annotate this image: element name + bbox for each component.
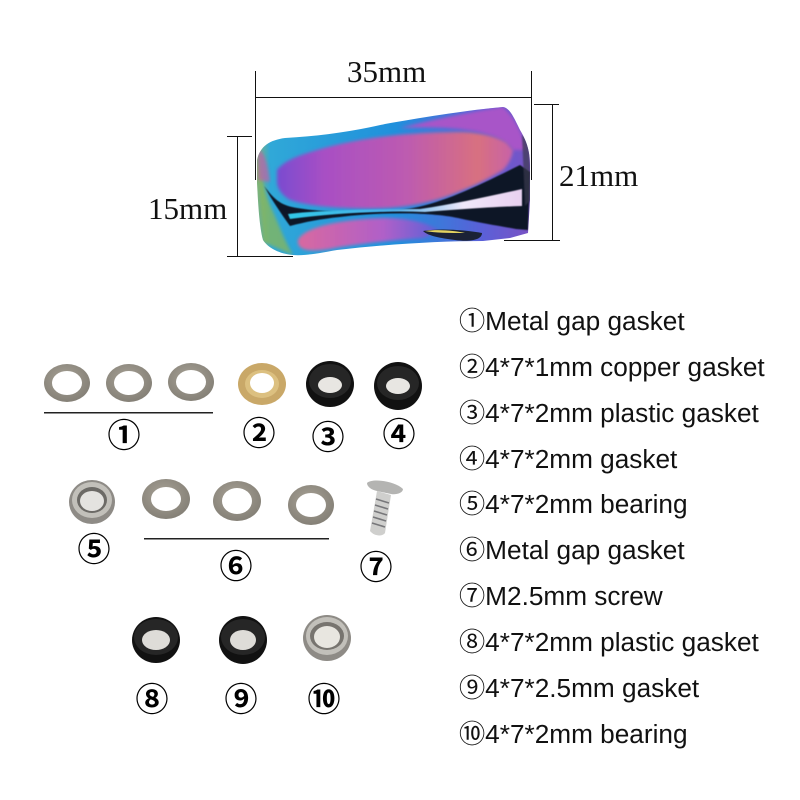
handle lower face <box>298 218 440 250</box>
part 3: plastic gasket: ③ <box>312 411 344 459</box>
part 10: bearing <box>303 615 351 721</box>
parts list: ⑤4*7*2mm bearing <box>459 489 688 519</box>
handle end cap <box>522 135 531 206</box>
part 7: screw <box>360 481 403 589</box>
parts group 1: metal gap gaskets: ① <box>108 409 140 457</box>
part 8: plastic gasket <box>132 617 180 721</box>
product photo: rainbow handle knob <box>257 107 530 256</box>
part 9: gasket: ⑨ <box>224 673 258 721</box>
part 5: bearing <box>69 480 115 571</box>
part 8: plastic gasket: ⑧ <box>136 673 168 721</box>
part 7: screw: ⑦ <box>360 541 392 589</box>
dimension: 15mm <box>148 136 293 257</box>
part 4: gasket: ④ <box>382 408 416 456</box>
parts list: ①Metal gap gasket <box>459 306 685 336</box>
parts list: ③4*7*2mm plastic gasket <box>459 398 760 428</box>
parts group 1: metal gap gaskets <box>44 363 214 457</box>
dimension: 15mm: 15mm <box>148 191 227 226</box>
dimension: 35mm: 35mm <box>347 54 426 89</box>
part 4: gasket <box>374 362 422 456</box>
parts group 6: metal gap gaskets <box>142 479 334 588</box>
part 2: copper gasket <box>238 363 286 455</box>
part 2: copper gasket: ② <box>242 407 276 455</box>
dimension: 21mm: 21mm <box>559 158 638 193</box>
parts list: ⑨4*7*2.5mm gasket <box>459 673 700 703</box>
handle left rim <box>257 160 293 255</box>
parts group 6: metal gap gaskets: ⑥ <box>220 540 252 588</box>
parts list: ②4*7*1mm copper gasket <box>459 352 765 382</box>
handle bright reflection <box>288 189 522 219</box>
handle dark band <box>264 165 530 230</box>
parts list: ④4*7*2mm gasket <box>459 444 678 474</box>
handle screw hole <box>423 230 482 241</box>
parts list: ⑧4*7*2mm plastic gasket <box>459 627 760 657</box>
parts list: ⑩4*7*2mm bearing <box>459 719 688 749</box>
parts list: ⑦M2.5mm screw <box>459 581 663 611</box>
dimension: 35mm <box>255 54 532 180</box>
part 10: bearing: ⑩ <box>308 673 340 721</box>
part 5: bearing: ⑤ <box>78 523 110 571</box>
dimension: 21mm <box>504 104 638 241</box>
part 9: gasket <box>219 616 267 721</box>
handle top sheen <box>400 107 526 150</box>
part 3: plastic gasket <box>306 361 354 459</box>
parts list <box>459 306 765 749</box>
handle upper face <box>277 132 513 209</box>
parts list: ⑥Metal gap gasket <box>459 535 685 565</box>
